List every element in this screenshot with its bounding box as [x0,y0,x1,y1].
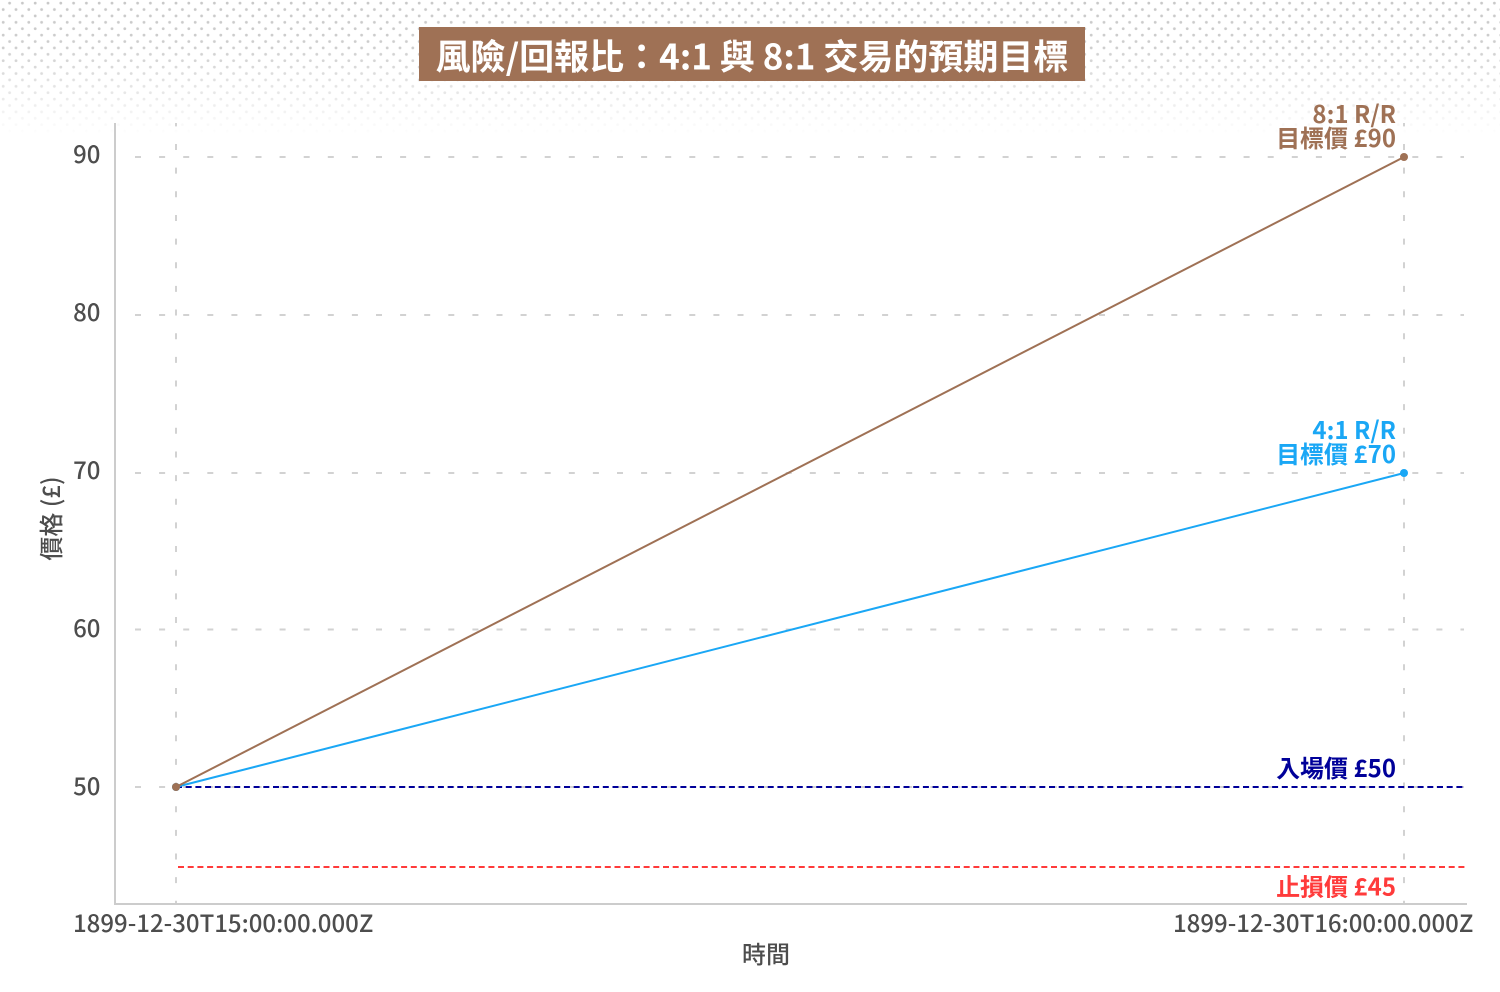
stop loss line [178,866,1465,868]
y axis tick labels: 50 [73,767,100,802]
axes [115,123,1467,904]
label: stop loss: 止損價 £45 [1276,868,1396,902]
x axis title: 時間 [742,935,790,970]
label: entry price: 入場價 £50 [1276,749,1396,784]
y axis tick labels: 90 [73,135,100,170]
4:1 target line [172,469,1408,791]
label: 8:1 target: 8:1 R/R [1312,95,1396,130]
label: 8:1 target: 目標價 £90 [1276,119,1396,154]
8:1 target line [172,153,1408,791]
label: 4:1 target: 目標價 £70 [1276,435,1396,470]
y axis tick labels: 80 [73,293,100,328]
x axis tick labels: 1899-12-30T15:00:00.000Z [73,904,373,939]
x axis tick labels [73,904,1473,939]
title: 風險/回報比：4:1 與 8:1 交易的預期目標 [436,30,1068,80]
entry price line [176,786,1463,788]
y axis tick labels [73,135,100,802]
y axis tick labels: 70 [73,451,100,486]
y axis title: 價格 (£) [32,476,67,561]
label: 4:1 target: 4:1 R/R [1312,411,1396,446]
x axis tick labels: 1899-12-30T16:00:00.000Z [1173,904,1473,939]
y axis tick labels: 60 [73,609,100,644]
